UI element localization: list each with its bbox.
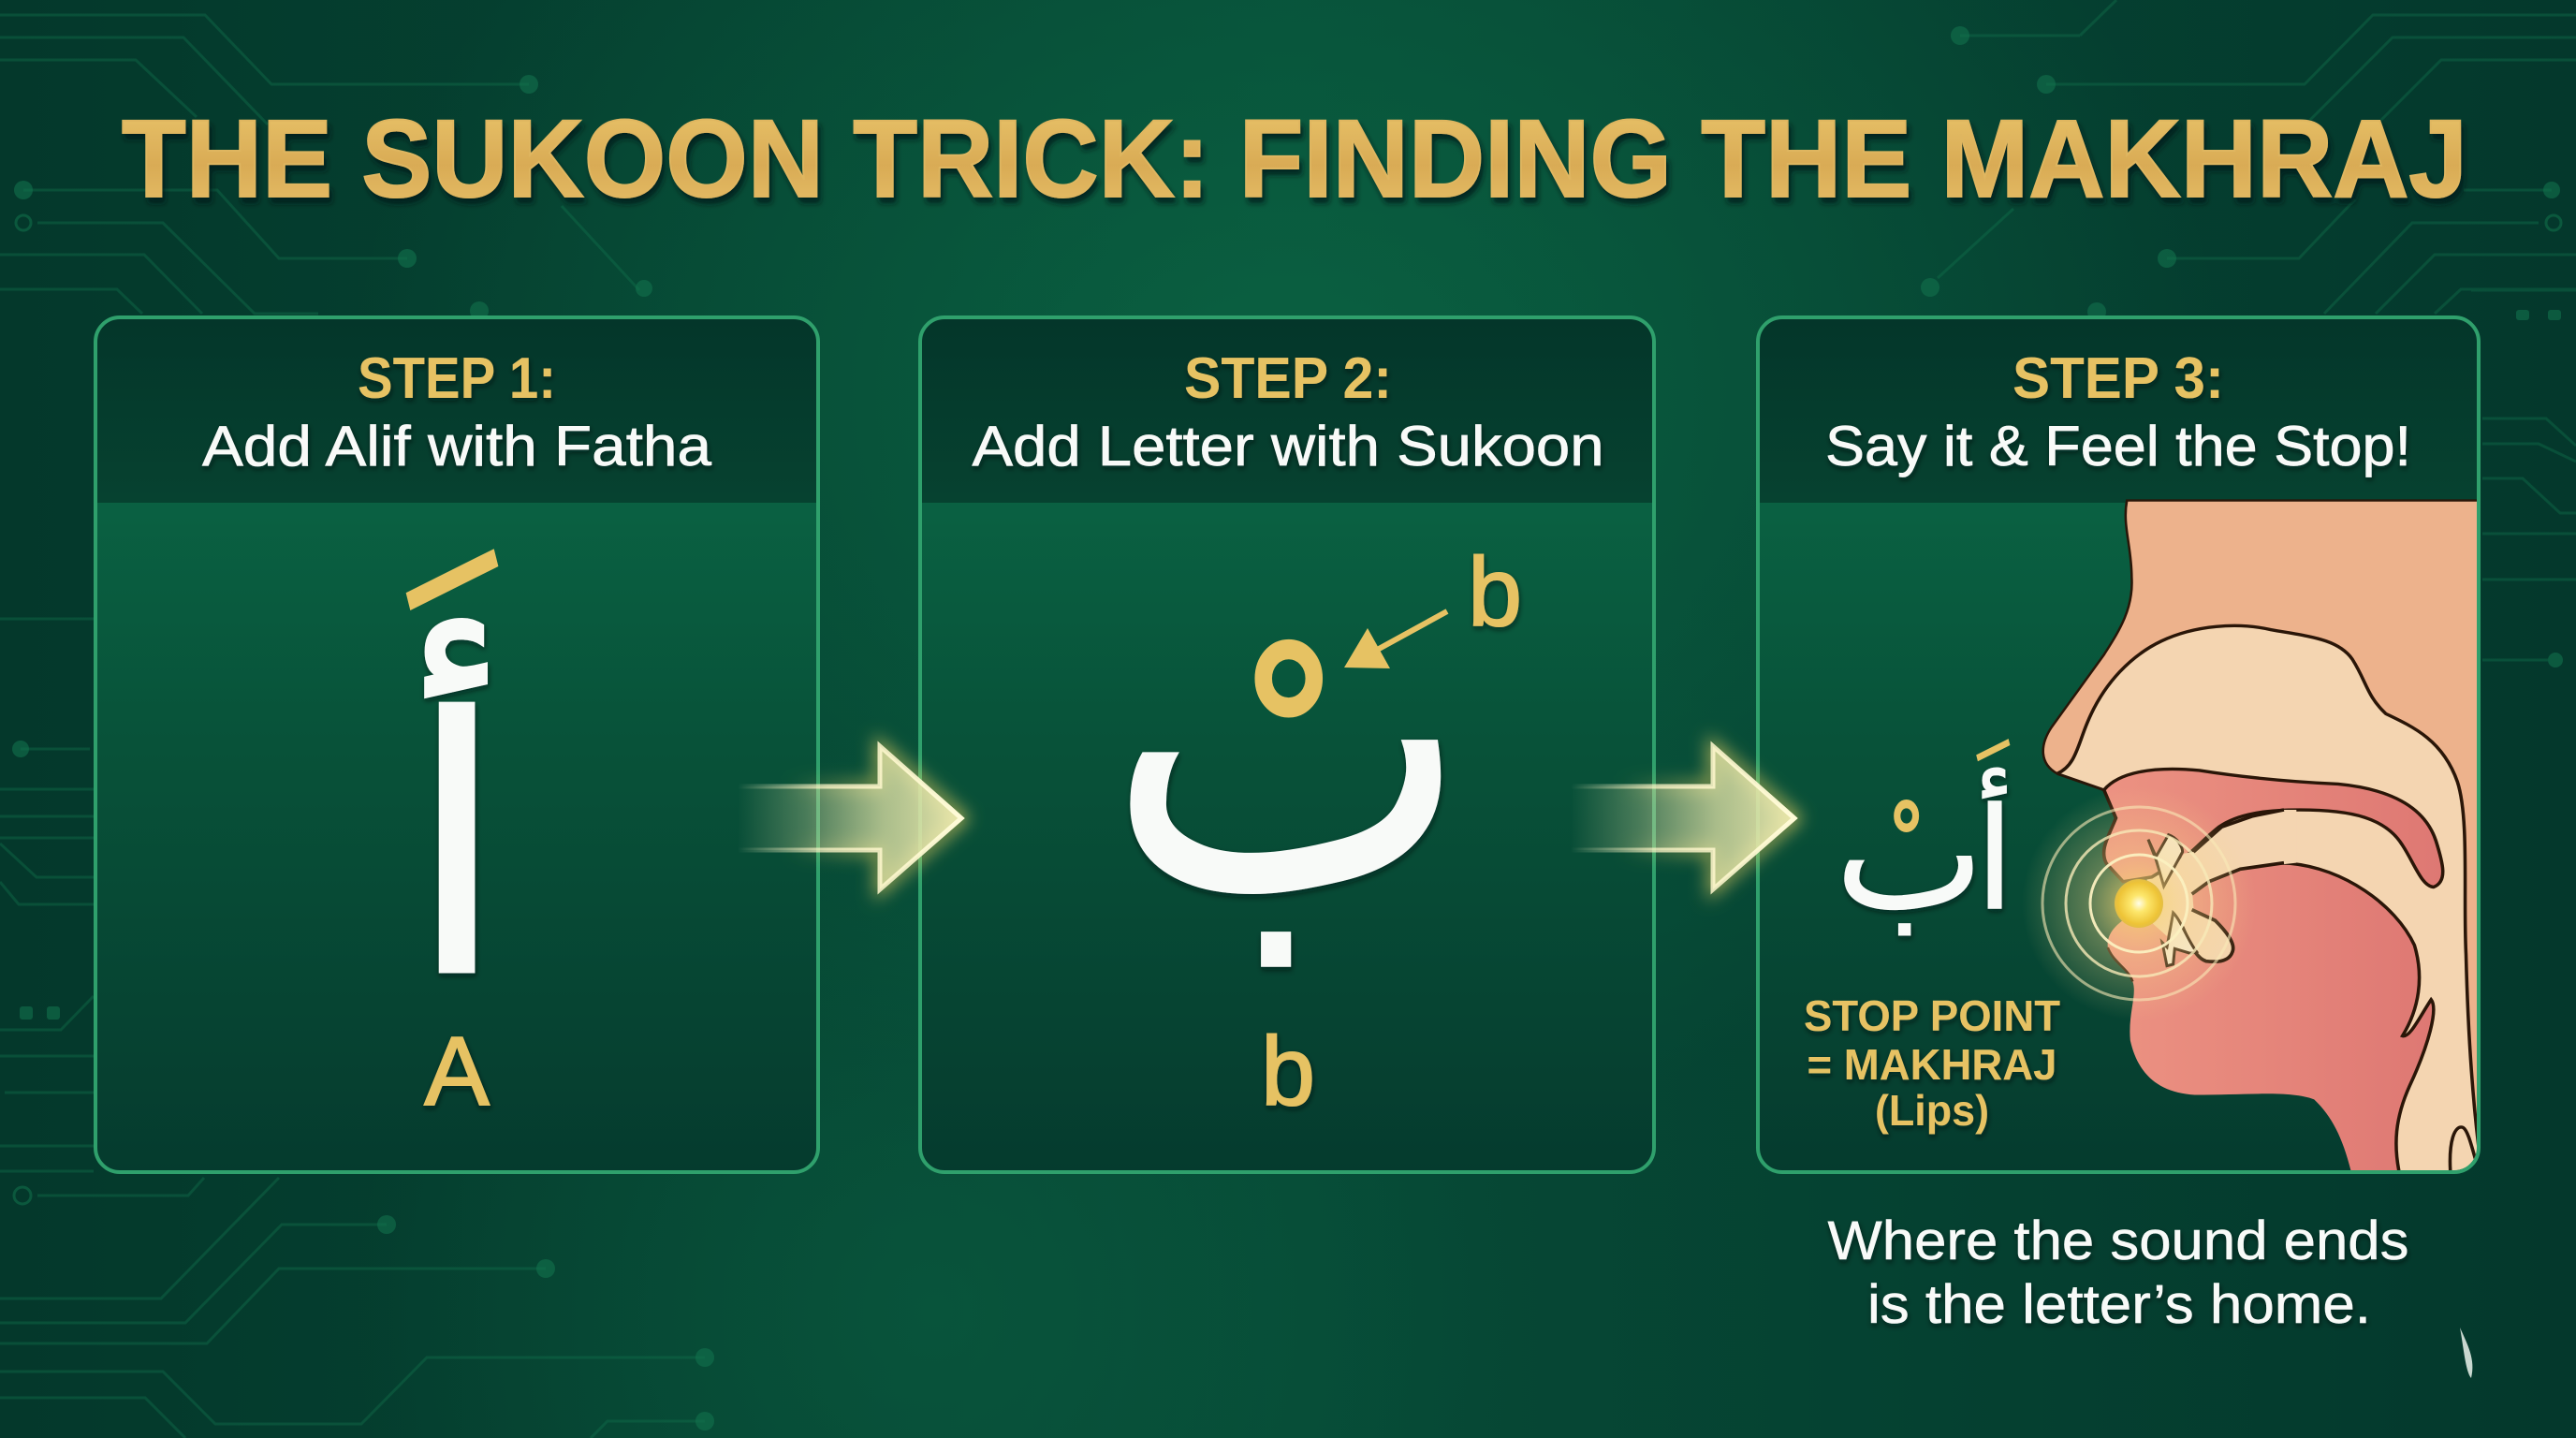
sukoon mark small: ْ: [1894, 800, 1919, 831]
panel: step 2: [920, 317, 1654, 1172]
step 1 subheading: Add Alif with Fatha: [202, 415, 712, 477]
stop point label: (Lips): [1875, 1086, 1989, 1135]
step 1 header band: [95, 317, 818, 503]
arabic letter ba: ب: [1106, 468, 1470, 995]
step 2 header band: [920, 317, 1654, 503]
title: THE SUKOON TRICK: FINDING THE MAKHRAJ: [122, 97, 2467, 221]
step 1 heading: STEP 1:: [358, 346, 556, 411]
mouth anatomy diagram: [2043, 501, 2486, 1177]
step 2 heading: STEP 2:: [1184, 346, 1392, 411]
stop point label: = MAKHRAJ: [1807, 1040, 2057, 1089]
step 1 border: [95, 317, 818, 1172]
caption: is the letter’s home.: [1867, 1274, 2371, 1335]
arabic word ba: ب: [1835, 761, 1984, 946]
stop point label: [1804, 991, 2060, 1135]
stop point label: STOP POINT: [1804, 991, 2060, 1040]
step 3 subheading: Say it & Feel the Stop!: [1825, 415, 2411, 477]
small white sliver artifact: [2460, 1328, 2472, 1378]
panel: step 1: [95, 317, 818, 1172]
panel: step 3: [1758, 317, 2486, 1177]
step 2 subheading: Add Letter with Sukoon: [972, 415, 1604, 477]
transliteration b: b: [1261, 1018, 1315, 1126]
panel: step 1: َ: [395, 544, 509, 616]
step 3 border: [1758, 317, 2479, 1172]
transliteration A: A: [424, 1018, 490, 1126]
step 3 heading: STEP 3:: [2012, 346, 2224, 411]
callout label b: b: [1468, 538, 1522, 647]
panel: step 3: َ: [1974, 739, 2012, 762]
step 3 header band: [1758, 317, 2479, 503]
arrow: step 2 to step 3: [1571, 746, 1794, 889]
caption: Where the sound ends: [1827, 1211, 2409, 1271]
mouth detail: teeth and tongue tip: [2148, 810, 2296, 966]
stop point glow and rings: [2022, 786, 2256, 1020]
arabic letter alif with hamza: أ: [408, 620, 505, 1054]
arabic word alif: أ: [1975, 768, 2014, 942]
step 2 border: [920, 317, 1654, 1172]
sukoon mark: ْ: [1254, 638, 1324, 716]
callout arrow to sukoon: [1344, 611, 1447, 668]
arrow: step 1 to step 2: [738, 746, 961, 889]
caption: [1827, 1211, 2409, 1335]
